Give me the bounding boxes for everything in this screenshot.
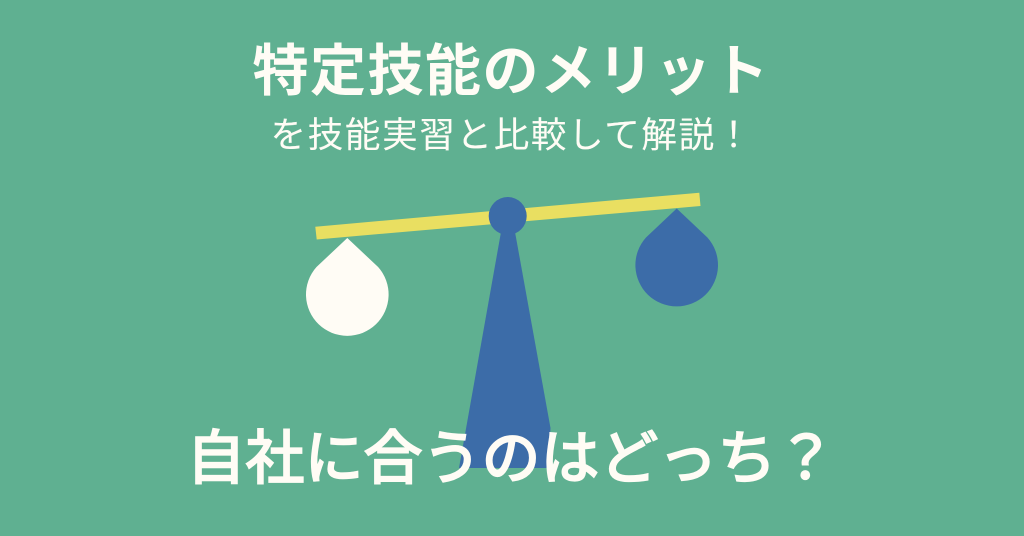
- icon: balance scale: [306, 193, 718, 468]
- scale stand: [459, 232, 550, 468]
- title: 特定技能のメリット: [252, 40, 770, 102]
- bottom question: 自社に合うのはどっち？: [187, 426, 836, 492]
- scale beam: [315, 193, 700, 240]
- scale pivot: [489, 197, 527, 235]
- left weight: white drop: [306, 238, 389, 336]
- subtitle: を技能実習と比較して解説！: [270, 115, 753, 155]
- right weight: blue drop: [635, 208, 718, 306]
